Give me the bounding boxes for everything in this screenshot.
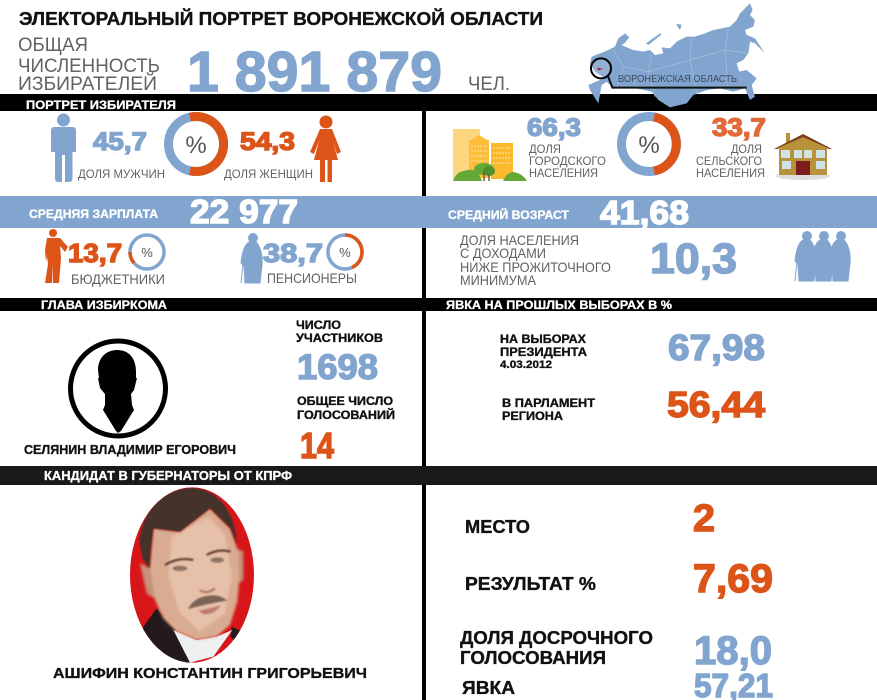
donut: urban rural split: %: [638, 132, 660, 159]
rural share: 33,7: [712, 114, 766, 142]
total votes value: 14: [300, 425, 334, 466]
urban label: [529, 142, 606, 180]
candidate portrait: [130, 487, 254, 663]
presidential election label: НА ВЫБОРАХ: [500, 332, 586, 346]
early voting label: ГОЛОСОВАНИЯ: [460, 648, 606, 668]
map of Russia: [588, 3, 765, 107]
turnout label: ЯВКА: [462, 678, 515, 698]
pensioners label: ПЕНСИОНЕРЫ: [267, 270, 357, 286]
unit: ЧЕЛ.: [468, 74, 510, 95]
early voting label: [460, 628, 653, 668]
rural label: СЕЛЬСКОГО: [696, 154, 762, 168]
ring: pensioners: [328, 235, 362, 269]
early voting value: 18,0: [694, 629, 772, 673]
donut: gender split: %: [185, 132, 207, 159]
presidential election label: ПРЕЗИДЕНТА: [500, 345, 587, 359]
urban label: НАСЕЛЕНИЯ: [529, 166, 598, 180]
salary label: СРЕДНЯЯ ЗАРПЛАТА: [29, 207, 158, 221]
urban label: ДОЛЯ: [529, 142, 561, 156]
icon: house: [774, 133, 832, 180]
presidential election label: 4.03.2012: [500, 359, 552, 371]
place value: 2: [693, 498, 715, 540]
rural label: НАСЕЛЕНИЯ: [696, 166, 765, 180]
icon: city: [453, 129, 527, 181]
urban label: ГОРОДСКОГО: [529, 154, 606, 168]
presidential turnout: 67,98: [668, 327, 765, 368]
poverty label: [460, 232, 611, 288]
poverty label: МИНИМУМА: [460, 272, 537, 288]
rural label: [696, 142, 765, 180]
total votes label: ГОЛОСОВАНИЙ: [297, 407, 395, 422]
early voting label: ДОЛЯ ДОСРОЧНОГО: [460, 628, 653, 648]
title: ЭЛЕКТОРАЛЬНЫЙ ПОРТРЕТ ВОРОНЕЖСКОЙ ОБЛАСТИ: [19, 8, 543, 29]
icon: man: [51, 114, 76, 182]
total voters label: [18, 35, 160, 95]
section heading: voter portrait: ПОРТРЕТ ИЗБИРАТЕЛЯ: [26, 98, 176, 112]
men label: ДОЛЯ МУЖЧИН: [78, 167, 165, 181]
ring: public sector: %: [141, 245, 153, 260]
total votes label: ОБЩЕЕ ЧИСЛО: [297, 394, 393, 408]
urban share: 66,3: [527, 114, 581, 142]
presidential election label: [500, 332, 587, 371]
icon: pensioner: [241, 234, 262, 283]
regional parliament label: В ПАРЛАМЕНТ: [502, 396, 596, 410]
blue band: [0, 196, 877, 228]
poverty label: НИЖЕ ПРОЖИТОЧНОГО: [460, 259, 611, 275]
ring: public sector: [130, 235, 164, 269]
regional parliament label: РЕГИОНА: [502, 409, 563, 423]
salary value: 22 977: [190, 193, 298, 230]
icon: three pensioners: [795, 232, 850, 281]
age label: СРЕДНИЙ ВОЗРАСТ: [448, 207, 570, 222]
rural label: ДОЛЯ: [731, 142, 762, 156]
icon: worker: [45, 229, 68, 283]
section heading: candidate: КАНДИДАТ В ГУБЕРНАТОРЫ ОТ КПРФ: [44, 469, 292, 483]
ring: pensioners: %: [339, 245, 351, 260]
result label: РЕЗУЛЬТАТ %: [465, 574, 596, 594]
regional parliament label: [502, 396, 596, 423]
map of Russia: ВОРОНЕЖСКАЯ ОБЛАСТЬ: [618, 73, 737, 85]
icon: woman: [310, 116, 341, 182]
total votes label: [297, 394, 395, 422]
participants value: 1698: [297, 348, 378, 387]
result value: 7,69: [693, 557, 773, 601]
participants label: ЧИСЛО: [296, 318, 341, 332]
pensioners share: 38,7: [263, 238, 323, 268]
total voters label: ЧИСЛЕННОСТЬ: [18, 56, 160, 77]
candidate name: АШИФИН КОНСТАНТИН ГРИГОРЬЕВИЧ: [53, 665, 367, 682]
participants label: УЧАСТНИКОВ: [296, 331, 383, 345]
poverty label: ДОЛЯ НАСЕЛЕНИЯ: [460, 232, 579, 248]
regional turnout: 56,44: [667, 384, 765, 425]
age value: 41,68: [600, 194, 689, 231]
commission head name: СЕЛЯНИН ВЛАДИМИР ЕГОРОВИЧ: [24, 443, 236, 457]
place label: МЕСТО: [465, 517, 530, 537]
total voters label: ИЗБИРАТЕЛЕЙ: [18, 73, 157, 95]
section heading: commission head: ГЛАВА ИЗБИРКОМА: [41, 298, 167, 312]
icon: silhouette in circle: [70, 341, 166, 436]
participants label: [296, 318, 383, 345]
total voters label: ОБЩАЯ: [18, 35, 88, 56]
women share: 54,3: [240, 128, 295, 156]
women label: ДОЛЯ ЖЕНЩИН: [224, 167, 313, 181]
poverty label: С ДОХОДАМИ: [460, 245, 546, 261]
poverty share: 10,3: [650, 235, 737, 283]
section heading: past turnout: ЯВКА НА ПРОШЛЫХ ВЫБОРАХ В %: [446, 298, 672, 312]
donut: gender split: [168, 116, 224, 172]
total voters number: 1 891 879: [187, 40, 442, 104]
donut: urban rural split: [622, 116, 676, 172]
public sector share: 13,7: [68, 238, 122, 268]
public sector label: БЮДЖЕТНИКИ: [71, 271, 165, 287]
men share: 45,7: [93, 128, 147, 156]
